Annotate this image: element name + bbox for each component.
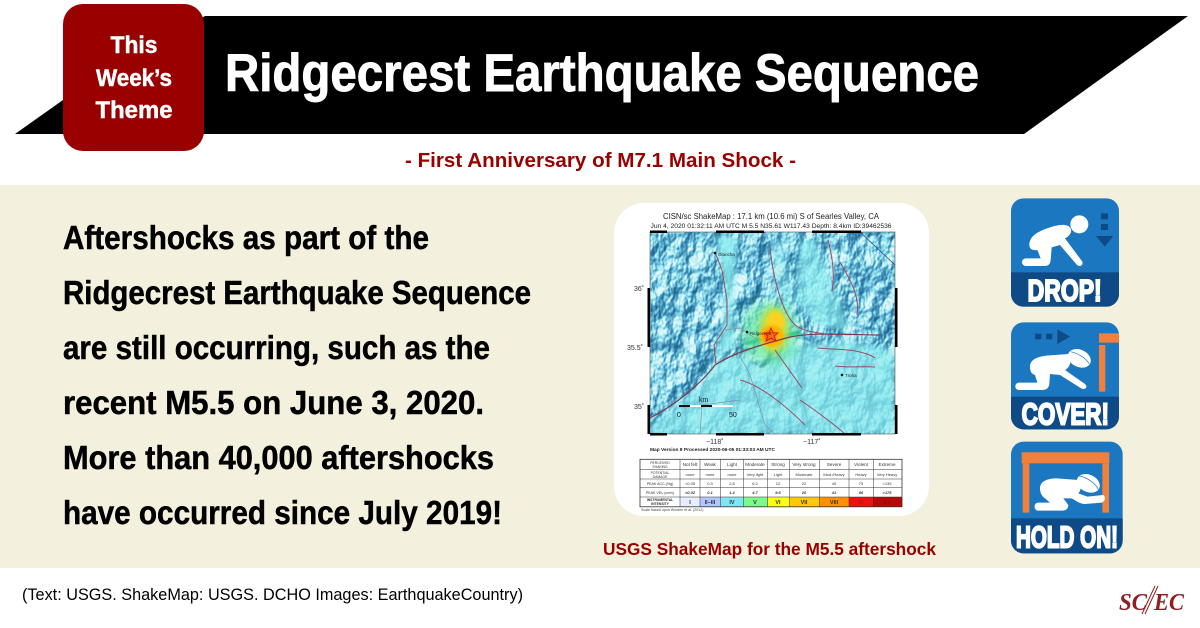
intensity legend table: POTENTIAL	[651, 471, 670, 475]
map version line: Map Version 8 Processed 2020-06-05 01:33:03 AM UTC	[650, 447, 776, 453]
map axis labels: 35.5˚	[627, 344, 643, 352]
logo: SCEC	[1119, 586, 1185, 616]
logo: SCEC: EC	[1153, 590, 1185, 616]
intensity legend table: X+	[884, 500, 890, 506]
intensity legend table: Very Heavy	[877, 472, 897, 477]
intensity legend table: Very strong	[792, 462, 816, 467]
intensity legend table: Heavy	[855, 472, 867, 477]
intensity legend table: V	[753, 500, 757, 506]
intensity legend table: 6.2	[752, 481, 759, 486]
subtitle: - First Anniversary of M7.1 Main Shock -	[405, 149, 796, 172]
map axis labels	[627, 285, 821, 446]
city labels: Ridgecrest	[750, 331, 772, 336]
intensity legend table: Violent	[854, 462, 869, 467]
intensity legend table: none	[686, 472, 695, 477]
icon: cover	[1011, 322, 1119, 431]
intensity legend table: none	[728, 472, 737, 477]
intensity legend table: INSTRUMENTAL	[647, 498, 673, 502]
caption: USGS ShakeMap for the M5.5 aftershock	[603, 539, 936, 559]
intensity legend table: Light	[727, 462, 738, 467]
body text	[63, 219, 531, 531]
map axis labels: −117˚	[803, 438, 821, 446]
map axis labels: 35˚	[634, 403, 644, 411]
body text: More than 40,000 aftershocks	[63, 439, 494, 476]
intensity legend table: 41	[831, 490, 837, 495]
intensity legend table: Extreme	[878, 462, 896, 467]
intensity legend table: Severe	[827, 462, 842, 467]
map title: CISN/sc ShakeMap : 17.1 km (10.6 mi) S of Searles Valley, CA	[663, 211, 879, 221]
intensity legend table: 0.1	[707, 490, 714, 495]
panel: shakemap image	[614, 203, 929, 516]
epicenter star	[764, 328, 778, 341]
logo: SCEC: SC	[1119, 590, 1148, 616]
body text: Ridgecrest Earthquake Sequence	[63, 274, 531, 311]
intensity legend table: INTENSITY	[651, 502, 670, 506]
intensity legend table: 2.8	[729, 481, 736, 486]
credits: (Text: USGS. ShakeMap: USGS. DCHO Images: EarthquakeCountry)	[22, 586, 523, 604]
intensity legend table: SHAKING	[652, 465, 668, 469]
intensity legend table: 12	[776, 481, 781, 486]
intensity legend table: 20	[801, 490, 807, 495]
intensity legend table: IX	[858, 500, 864, 506]
scale bar: km	[699, 397, 708, 404]
intensity legend table: PEAK VEL.(cm/s)	[646, 491, 674, 495]
badge: this week's theme: Week’s	[96, 65, 172, 92]
badge: this week's theme: Theme	[96, 97, 172, 124]
shaking intensity hotspot	[742, 302, 800, 366]
title: Ridgecrest Earthquake Sequence	[225, 44, 979, 103]
intensity legend table: DAMAGE	[653, 475, 668, 479]
intensity legend table: Scale based upon Worden et al. (2012)	[641, 508, 703, 512]
intensity legend table: Light	[774, 472, 783, 477]
body text: recent M5.5 on June 3, 2020.	[63, 384, 484, 421]
title banner	[15, 16, 1188, 134]
intensity legend table: 75	[859, 481, 864, 486]
map frame ticks	[648, 230, 898, 436]
body text: Aftershocks as part of the	[63, 219, 429, 256]
city labels: Olancha	[718, 252, 735, 257]
intensity legend table: Strong	[771, 462, 785, 467]
intensity legend table: Moderate	[745, 462, 765, 467]
intensity legend table: <0.05	[685, 481, 696, 486]
intensity legend table: II–III	[705, 500, 716, 506]
intensity legend table: Weak	[704, 462, 717, 467]
intensity legend table: 4.7	[751, 490, 759, 495]
intensity legend table: Mod./Heavy	[823, 472, 845, 477]
map subtitle: Jun 4, 2020 01:32:11 AM UTC M 5.5 N35.61 W117.43 Depth: 8.4km ID:39462536	[650, 224, 892, 230]
map axis labels: 36˚	[634, 285, 644, 293]
intensity legend table: <0.02	[685, 490, 696, 495]
intensity legend table: 22	[802, 481, 807, 486]
light valley areas	[650, 236, 895, 434]
icons column	[1011, 198, 1123, 554]
badge: this week's theme	[63, 4, 204, 151]
badge: this week's theme: This	[110, 32, 158, 59]
intensity legend table: 0.3	[707, 481, 714, 486]
intensity legend table: >178	[882, 490, 892, 495]
intensity legend table: Very light	[747, 472, 764, 477]
shakemap	[650, 232, 895, 434]
faults and roads	[650, 240, 878, 434]
intensity legend table: 1.4	[729, 490, 736, 495]
intensity legend table: none	[706, 472, 715, 477]
intensity legend table: PERCEIVED	[650, 461, 670, 465]
city labels: Trona	[845, 373, 857, 378]
intensity legend table: VII	[801, 500, 808, 506]
intensity legend table: VIII	[830, 500, 839, 506]
intensity legend table: PEAK ACC.(%g)	[647, 482, 673, 486]
intensity legend table: Not felt	[683, 462, 698, 467]
intensity legend table: VI	[775, 500, 781, 506]
background band	[0, 185, 1200, 568]
intensity legend table: >139	[882, 481, 892, 486]
icon: hold on	[1011, 442, 1123, 554]
intensity legend table: I	[689, 500, 691, 506]
intensity legend table	[640, 459, 902, 512]
scale bar: 50	[729, 412, 737, 419]
intensity legend table: 9.6	[775, 490, 782, 495]
icon: drop	[1011, 198, 1119, 308]
intensity legend table: 86	[859, 490, 864, 495]
icon: drop: DROP!	[1028, 274, 1102, 308]
icon: cover: COVER!	[1022, 397, 1109, 431]
body text: are still occurring, such as the	[63, 329, 490, 366]
icon: hold on: HOLD ON!	[1016, 520, 1118, 554]
body text: have occurred since July 2019!	[63, 494, 502, 531]
city labels	[714, 252, 857, 378]
scale bar: 0	[677, 412, 681, 419]
intensity legend table: Moderate	[796, 472, 813, 477]
map axis labels: −118˚	[706, 438, 724, 446]
intensity legend table: IV	[729, 500, 735, 506]
intensity legend table: 40	[832, 481, 837, 486]
scale bar	[677, 397, 737, 419]
